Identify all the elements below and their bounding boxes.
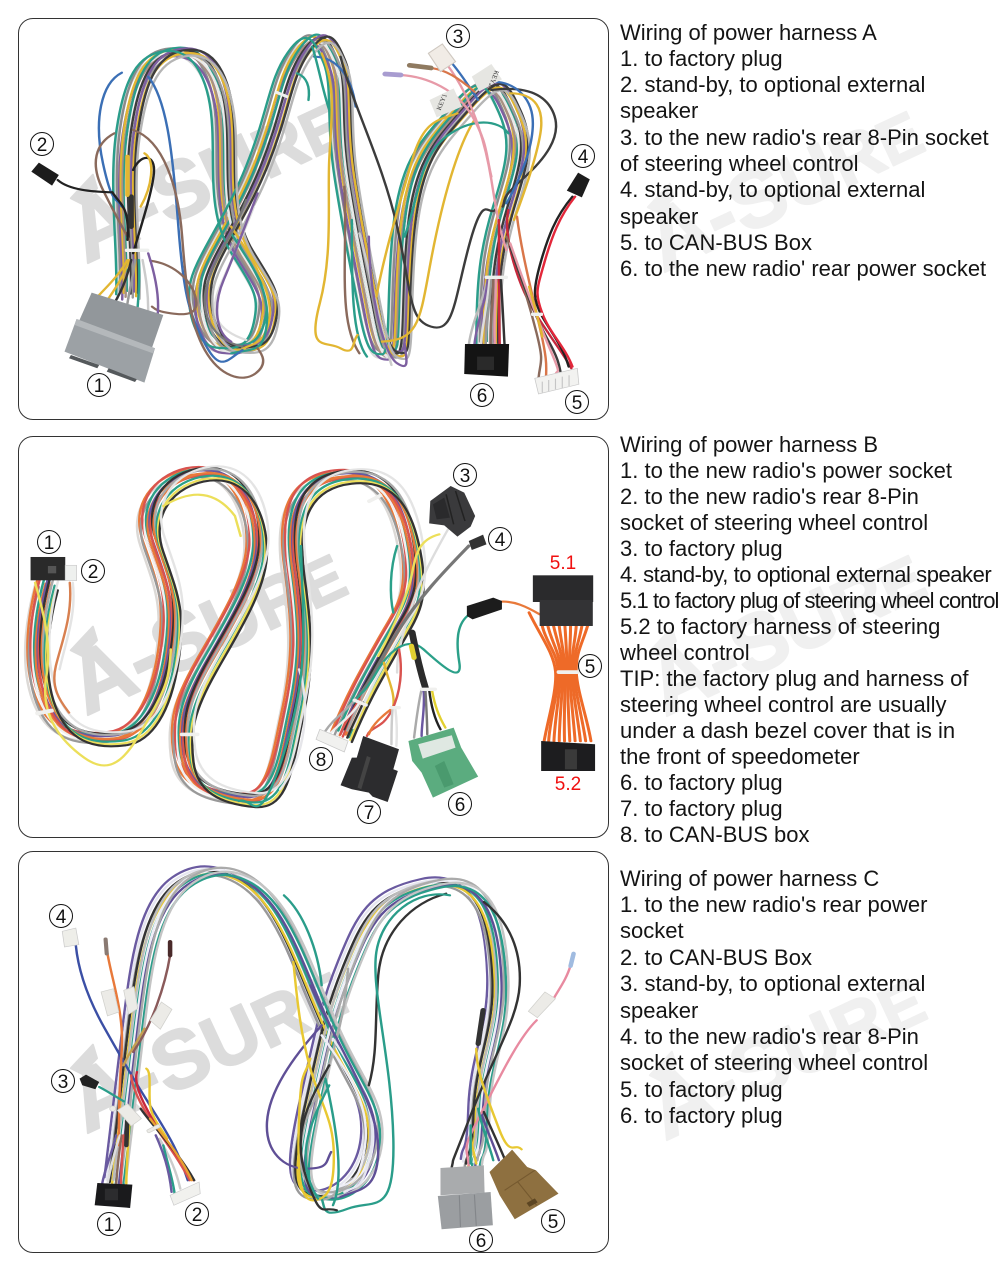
- harness A drawing: [31, 35, 590, 394]
- text block: wiring of power harness C: 2. to CAN-BUS Box: [620, 945, 812, 970]
- callouts: harness A numbers: [30, 24, 594, 414]
- tag: KEY1: [430, 88, 462, 117]
- tag: KEY2: [472, 64, 502, 91]
- text block: wiring of power harness A: [620, 20, 989, 281]
- text block: wiring of power harness B: 5.2 to factory harness of steering: [620, 614, 940, 638]
- fan into connector 1: [99, 260, 127, 295]
- icon: plug 4: [469, 535, 486, 550]
- number 5: 5: [585, 657, 595, 678]
- text block: wiring of power harness B: socket of steering wheel control: [620, 510, 928, 534]
- icon: connector 6 grey: [438, 1165, 493, 1229]
- text block: wiring of power harness C: 6. to factory plug: [620, 1103, 783, 1128]
- black wires at connector 1 side: [58, 180, 112, 192]
- number 3: [446, 24, 470, 48]
- number 2: [82, 560, 104, 583]
- text block: wiring of power harness C: Wiring of power harness C: [620, 866, 879, 890]
- icon: tube pink end: [385, 67, 401, 82]
- icon: connector 2 white: [65, 565, 77, 581]
- text block: wiring of power harness A: speaker: [620, 98, 698, 123]
- text block: wiring of power harness A: 1. to factory plug: [620, 46, 783, 71]
- fan to connector 8: [325, 699, 356, 731]
- wire bundle A: [58, 35, 575, 378]
- text block: wiring of power harness C: 3. stand-by, to optional external: [620, 971, 925, 996]
- icon: plug 4: [567, 173, 590, 197]
- icon: inline plug 5: [467, 598, 502, 619]
- wires to connector 7: [384, 663, 394, 706]
- extra strands widening the first loop: [231, 227, 270, 348]
- number 4: [572, 144, 594, 168]
- number 3: [454, 464, 476, 487]
- text block: wiring of power harness A: 3. to the new radio's rear 8-Pin socket: [620, 125, 989, 150]
- icon: connector 2 white: [170, 1182, 200, 1205]
- number 3: 3: [460, 466, 470, 487]
- text block: wiring of power harness C: socket of steering wheel control: [620, 1050, 928, 1075]
- number 3: 3: [58, 1072, 68, 1093]
- callouts: harness B numbers: [38, 464, 602, 824]
- watermark: A-SURE harness C text column: A-SURE: [632, 948, 938, 1158]
- number 1: 1: [44, 533, 54, 554]
- icon: plug 2: [31, 163, 59, 186]
- icon: connector 6 black: [464, 344, 509, 377]
- icon: plug 3: [80, 1075, 99, 1089]
- icon: connector 1 grey factory plug: [64, 293, 163, 383]
- wire bundle B: [25, 466, 591, 807]
- wire bundle C: [76, 866, 571, 1213]
- text block: wiring of power harness B: wheel control: [620, 640, 750, 664]
- text block: wiring of power harness C: [620, 866, 928, 1128]
- fan into connector 6: [469, 280, 488, 345]
- tag: KEY1: KEY1: [436, 93, 449, 111]
- number 2: 2: [192, 1205, 202, 1226]
- tube and wires to connector 6: [412, 633, 425, 688]
- text block: wiring of power harness C: 1. to the new radio's rear power: [620, 892, 927, 917]
- number 2: [30, 132, 54, 156]
- text block: wiring of power harness B: 6. to factory plug: [620, 770, 783, 794]
- number 4: 4: [495, 530, 506, 551]
- number 2: 2: [88, 562, 98, 583]
- branch to connector 5: [507, 210, 571, 368]
- panel: harness A frame: [18, 18, 609, 420]
- number 5: 5: [572, 393, 582, 414]
- icon: tube orange end: [410, 65, 431, 68]
- text block: wiring of power harness B: steering wheel control are usually: [620, 692, 947, 716]
- icon: tube orange end: [106, 939, 107, 954]
- icon: connector 8 white: [316, 729, 348, 752]
- number 3: 3: [453, 27, 463, 48]
- text block: wiring of power harness B: [620, 432, 999, 846]
- icon: connector 6 green: [408, 728, 478, 798]
- zip ties A: [125, 90, 543, 316]
- text block: wiring of power harness A: of steering wheel control: [620, 151, 858, 176]
- orange wires 5: [529, 613, 591, 741]
- icon: connector 1 black: [31, 557, 65, 580]
- icon: plug 4 white: [62, 928, 79, 947]
- text block: wiring of power harness A: speaker: [620, 204, 698, 229]
- text block: wiring of power harness B: 3. to factory plug: [620, 536, 783, 560]
- number 5: [566, 390, 588, 414]
- label 5.2: 5.2: [555, 774, 581, 795]
- icon: tube pink end: [571, 954, 574, 966]
- text block: wiring of power harness B: the front of speedometer: [620, 744, 860, 768]
- number 8: [310, 748, 332, 771]
- number 5: 5: [548, 1212, 558, 1233]
- tags C: [101, 987, 555, 1133]
- icon: connector 5.2: [541, 741, 595, 771]
- zip ties B: [35, 493, 579, 736]
- icon: connector 5 white: [535, 368, 579, 394]
- text block: wiring of power harness B: 7. to factory plug: [620, 796, 783, 820]
- text block: wiring of power harness B: 5.1 to factory plug of steering wheel control: [620, 588, 999, 612]
- icon: connector 3 black: [429, 486, 475, 537]
- number 6: 6: [477, 386, 487, 407]
- watermark: A-SURE harness A text column: A-SURE: [630, 80, 936, 290]
- icon: plug 3: [428, 44, 456, 72]
- number 4: [488, 528, 512, 551]
- number 5: [542, 1210, 564, 1233]
- number 1: 1: [104, 1215, 114, 1236]
- number 6: [470, 384, 494, 407]
- text block: wiring of power harness A: 6. to the new radio' rear power socket: [620, 256, 986, 281]
- text block: wiring of power harness B: under a dash bezel cover that is in: [620, 718, 955, 742]
- text block: wiring of power harness C: socket: [620, 918, 684, 943]
- text block: wiring of power harness C: 5. to factory plug: [620, 1077, 783, 1102]
- watermark: A-SURE harness B text column: A-SURE: [632, 524, 938, 734]
- number 4: 4: [578, 147, 589, 168]
- loose wires C: [76, 945, 188, 1180]
- branch to plug 4: [535, 197, 572, 367]
- number 6: 6: [476, 1231, 486, 1252]
- watermark: A-SURE harness B: A-SURE: [53, 523, 359, 733]
- number 1: [98, 1212, 120, 1236]
- watermark: A-SURE harness C: A-SURE: [53, 941, 359, 1151]
- callouts: harness C numbers: [50, 904, 564, 1252]
- icon: connector 5.1: [533, 575, 593, 626]
- text block: wiring of power harness A: 5. to CAN-BUS Box: [620, 230, 812, 255]
- number 6: 6: [455, 795, 465, 816]
- text block: wiring of power harness B: 4. stand-by, to optional external speaker: [620, 562, 991, 586]
- loose wires A: [99, 73, 122, 207]
- number 5: [578, 654, 602, 678]
- text block: wiring of power harness B: Wiring of power harness B: [620, 432, 878, 456]
- icon: connector 5 brown: [489, 1150, 558, 1219]
- text block: wiring of power harness B: 2. to the new radio's rear 8-Pin: [620, 484, 919, 508]
- number 4: [50, 904, 72, 928]
- number 1: [88, 374, 110, 397]
- text block: wiring of power harness A: 2. stand-by, to optional external: [620, 72, 925, 97]
- number 1: 1: [94, 376, 104, 397]
- text block: wiring of power harness A: 4. stand-by, to optional external: [620, 177, 925, 202]
- number 6: [448, 792, 472, 816]
- text block: wiring of power harness B: 1. to the new radio's power socket: [620, 458, 952, 482]
- number 2: 2: [37, 135, 47, 156]
- number 2: [186, 1202, 208, 1226]
- icon: connector 1 black: [95, 1183, 132, 1208]
- text block: wiring of power harness B: 8. to CAN-BUS box: [620, 822, 810, 846]
- harness B drawing: [25, 466, 595, 807]
- panel: harness B frame: [18, 436, 609, 838]
- panel: harness C frame: [18, 851, 609, 1253]
- tag: KEY2: KEY2: [487, 69, 500, 87]
- number 7: [358, 800, 380, 824]
- number 1: [38, 530, 60, 554]
- number 6: [470, 1228, 492, 1252]
- loose wires B: [35, 583, 171, 765]
- text block: wiring of power harness A: Wiring of power harness A: [620, 20, 877, 44]
- number 3: [52, 1070, 74, 1093]
- harness C drawing: [62, 866, 574, 1229]
- number 4: 4: [56, 907, 67, 928]
- text block: wiring of power harness C: 4. to the new radio's rear 8-Pin: [620, 1024, 919, 1049]
- text block: wiring of power harness B: TIP: the factory plug and harness of: [620, 666, 969, 690]
- number 8: 8: [316, 750, 326, 771]
- watermark: A-SURE harness A: A-SURE: [53, 71, 359, 281]
- number 7: 7: [364, 803, 374, 824]
- text block: wiring of power harness C: speaker: [620, 998, 698, 1023]
- label 5.1: 5.1: [550, 553, 576, 574]
- icon: connector 7 black: [341, 736, 399, 802]
